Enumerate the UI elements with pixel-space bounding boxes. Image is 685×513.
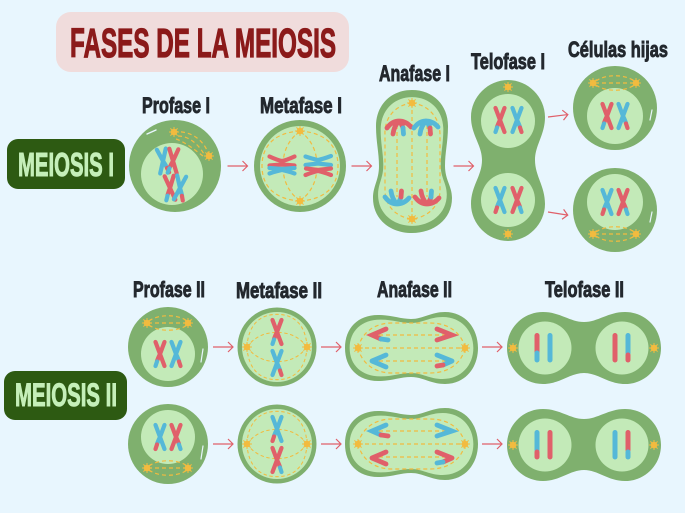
- label: Meiosis I: [7, 139, 125, 189]
- arrow: [352, 161, 372, 171]
- arrow: [228, 161, 248, 171]
- arrow: [482, 439, 502, 449]
- arrow: [321, 342, 341, 352]
- arrow: [213, 342, 233, 352]
- cell: Metafase I: [254, 120, 346, 212]
- heading: Metafase I: Metafase I: [260, 93, 342, 118]
- title: FASES DE LA MEIOSIS: [70, 20, 336, 66]
- cell: Telofase I: [471, 80, 545, 241]
- arrow: to daughter cell top: [547, 110, 568, 122]
- heading: Anafase I: Anafase I: [379, 61, 450, 86]
- arrow: [454, 161, 474, 171]
- title: [56, 12, 349, 72]
- arrow: to daughter cell bottom: [547, 207, 569, 220]
- label: Meiosis II: [4, 371, 127, 420]
- heading: Profase I: Profase I: [142, 93, 210, 118]
- cell: Telofase II top: [507, 312, 661, 384]
- label: Meiosis II: MEIOSIS II: [15, 377, 117, 413]
- cell: Anafase I: [373, 90, 452, 233]
- cell: daughter bottom: [573, 168, 657, 252]
- cell: Anafase II bottom: [345, 408, 478, 480]
- label: Meiosis I: MEIOSIS I: [18, 146, 114, 183]
- heading: Telofase II: Telofase II: [545, 277, 624, 302]
- arrow: [213, 439, 233, 449]
- cell: daughter top: [573, 66, 657, 150]
- cell: Metafase II bottom: [238, 404, 316, 484]
- cell: Anafase II top: [345, 312, 478, 384]
- arrow: [321, 439, 341, 449]
- heading: Profase II: Profase II: [133, 277, 205, 302]
- cell: Metafase II top: [238, 308, 316, 386]
- arrow: [482, 342, 502, 352]
- heading: Telofase I: Telofase I: [471, 49, 545, 74]
- heading: Metafase II: Metafase II: [236, 278, 322, 303]
- cell: Profase II bottom: [128, 404, 208, 484]
- heading: Anafase II: Anafase II: [377, 277, 452, 302]
- cell: Profase I: [129, 120, 221, 212]
- cell: Telofase II bottom: [507, 409, 661, 481]
- cell: Profase II top: [128, 307, 208, 387]
